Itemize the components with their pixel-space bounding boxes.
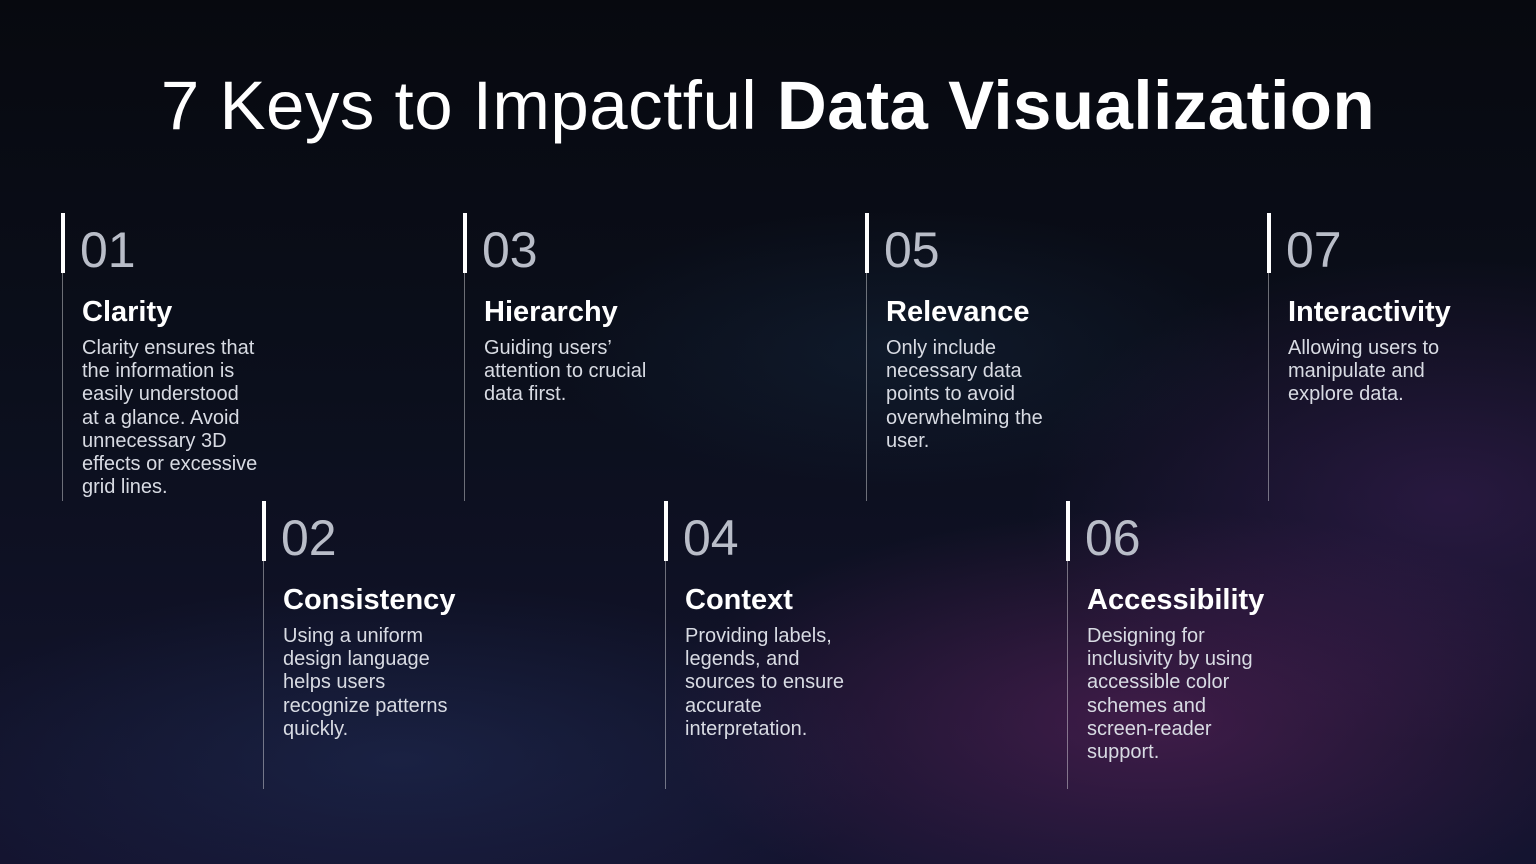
- text interactivity: [1288, 337, 1439, 405]
- number 05: 05: [884, 222, 940, 278]
- text interactivity: Allowing users to: [1288, 337, 1439, 359]
- number 01: 01: [80, 222, 136, 278]
- heading consistency: Consistency: [283, 584, 455, 616]
- text relevance: [886, 337, 1043, 452]
- panel: 07 interactivity: [1267, 213, 1451, 501]
- text clarity: Clarity ensures that: [82, 337, 254, 359]
- text consistency: helps users: [283, 671, 385, 693]
- title: 7 Keys to Impactful Data Visualization: [161, 67, 1375, 144]
- text relevance: overwhelming the: [886, 407, 1043, 429]
- text clarity: at a glance. Avoid: [82, 407, 240, 429]
- text clarity: [82, 337, 257, 498]
- number 04: 04: [683, 510, 739, 566]
- panel: 02 consistency: [262, 501, 456, 789]
- text accessibility: accessible color: [1087, 671, 1229, 693]
- text relevance: points to avoid: [886, 383, 1015, 405]
- text accessibility: support.: [1087, 741, 1159, 763]
- text consistency: design language: [283, 648, 430, 670]
- text hierarchy: Guiding users’: [484, 337, 612, 359]
- text relevance: necessary data: [886, 360, 1022, 382]
- text accessibility: inclusivity by using: [1087, 648, 1253, 670]
- panel: 04 context: [664, 501, 844, 789]
- panel: 01 clarity: [61, 213, 257, 501]
- text consistency: recognize patterns: [283, 695, 448, 717]
- number 07: 07: [1286, 222, 1342, 278]
- text consistency: quickly.: [283, 718, 348, 740]
- text context: legends, and: [685, 648, 800, 670]
- panel: 03 hierarchy: [463, 213, 646, 501]
- text accessibility: Designing for: [1087, 625, 1205, 647]
- panel: 06 accessibility: [1066, 501, 1264, 789]
- number 06: 06: [1085, 510, 1141, 566]
- heading hierarchy: Hierarchy: [484, 296, 618, 328]
- heading context: Context: [685, 584, 793, 616]
- number 03: 03: [482, 222, 538, 278]
- text accessibility: schemes and: [1087, 695, 1206, 717]
- text consistency: [283, 625, 448, 740]
- text context: accurate: [685, 695, 762, 717]
- heading accessibility: Accessibility: [1087, 584, 1264, 616]
- text clarity: unnecessary 3D: [82, 430, 227, 452]
- heading interactivity: Interactivity: [1288, 296, 1451, 328]
- text hierarchy: data first.: [484, 383, 566, 405]
- text clarity: the information is: [82, 360, 234, 382]
- panel: 05 relevance: [865, 213, 1043, 501]
- text relevance: user.: [886, 430, 929, 452]
- text context: sources to ensure: [685, 671, 844, 693]
- text consistency: Using a uniform: [283, 625, 423, 647]
- number 02: 02: [281, 510, 337, 566]
- text context: Providing labels,: [685, 625, 832, 647]
- text interactivity: explore data.: [1288, 383, 1404, 405]
- text clarity: easily understood: [82, 383, 239, 405]
- text interactivity: manipulate and: [1288, 360, 1425, 382]
- heading relevance: Relevance: [886, 296, 1030, 328]
- text accessibility: screen-reader: [1087, 718, 1212, 740]
- text clarity: grid lines.: [82, 476, 168, 498]
- text hierarchy: [484, 337, 646, 405]
- text clarity: effects or excessive: [82, 453, 257, 475]
- heading clarity: Clarity: [82, 296, 172, 328]
- text context: interpretation.: [685, 718, 807, 740]
- text context: [685, 625, 844, 740]
- text accessibility: [1087, 625, 1253, 763]
- text relevance: Only include: [886, 337, 996, 359]
- text hierarchy: attention to crucial: [484, 360, 646, 382]
